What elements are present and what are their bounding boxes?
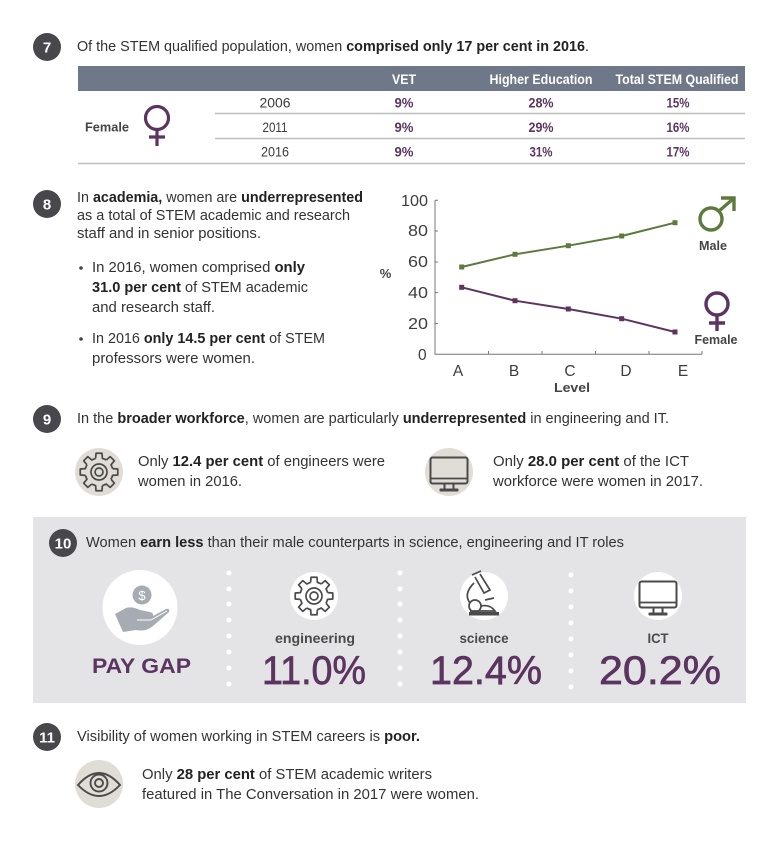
table header: Total STEM Qualified — [616, 72, 738, 87]
icon: microscope — [467, 571, 499, 616]
stat: engineering: 11.0% — [262, 649, 366, 693]
badge 11 — [33, 723, 61, 751]
label: female: Female — [694, 332, 738, 347]
text: academic writers: featured in The Conversation in 2017 were women. — [142, 787, 479, 803]
bullet: 31.0 per cent: 31.0 per cent of STEM academic — [92, 280, 308, 296]
paragraph 8: staff and in senior positions. — [77, 226, 261, 242]
icon: male symbol — [700, 198, 734, 230]
row 2016: 31% — [530, 144, 552, 160]
text: academic writers: Only 28 per cent of STEM academic writers — [142, 767, 432, 783]
badge 7 — [33, 33, 61, 61]
section 9: broader workforce — [33, 405, 703, 496]
label: male: Male — [699, 238, 727, 253]
row 2011: 2011 — [262, 120, 288, 135]
section 8: academia — [33, 190, 738, 395]
axes: B — [509, 363, 519, 380]
row 2006: 15% — [666, 96, 690, 110]
row 2016 — [261, 144, 690, 160]
stat: ICT: ICT — [648, 630, 669, 646]
bullet: 14.5 per cent — [79, 331, 325, 367]
stat: science — [430, 571, 542, 693]
badge 7: 7 — [43, 40, 51, 56]
section 11: visibility — [33, 723, 479, 808]
axes — [380, 193, 702, 395]
stat: ICT: 20.2% — [599, 649, 721, 693]
bullet: 14.5 per cent: In 2016 only 14.5 per cent of STEM — [92, 331, 325, 347]
stat: engineering: engineering — [275, 630, 355, 646]
paragraph 8 — [77, 190, 363, 242]
axes: A — [453, 363, 464, 380]
stat: science: science — [460, 630, 509, 646]
badge 9: 9 — [43, 412, 51, 428]
badge 8: 8 — [43, 196, 51, 214]
paragraph 8: In academia, women are underrepresented — [77, 190, 363, 206]
ICT text — [492, 454, 703, 490]
text: academic writers — [142, 767, 479, 803]
paragraph 8: as a total of STEM academic and research — [77, 208, 350, 224]
icon: female symbol — [706, 293, 728, 331]
row label: female: Female — [85, 120, 129, 134]
male series — [460, 221, 677, 269]
row 2011 — [262, 120, 690, 135]
heading 9: In the broader workforce, women are particularly underrepresented in engineering and IT. — [77, 411, 669, 427]
stat: science: 12.4% — [430, 649, 542, 693]
badge 8 — [33, 190, 61, 218]
row 2016: 9% — [394, 144, 414, 160]
panel: pay gap — [33, 517, 746, 703]
table header — [78, 66, 745, 91]
row 2006 — [260, 96, 690, 110]
axes: 20 — [408, 316, 428, 333]
stat: ICT — [599, 572, 721, 693]
ICT text: workforce were women in 2017. — [492, 474, 703, 490]
badge 9 — [33, 405, 61, 433]
stat: engineering — [262, 572, 366, 693]
table header: VET — [392, 72, 417, 87]
axes: 60 — [408, 254, 428, 271]
row 2006: 28% — [528, 96, 554, 110]
icon: gear — [75, 448, 123, 496]
bullet: 31.0 per cent: and research staff. — [92, 300, 215, 316]
axes: Level — [554, 380, 590, 395]
row 2011: 29% — [528, 120, 554, 135]
row 2016: 17% — [666, 144, 690, 160]
axes: C — [564, 363, 576, 380]
badge 10 — [49, 529, 77, 557]
axes: % — [380, 266, 392, 281]
badge 11: 11 — [39, 730, 55, 746]
ICT text: Only 28.0 per cent of the ICT — [493, 454, 689, 470]
row 2006: 9% — [394, 96, 414, 110]
icon: hand with coin: $ — [138, 588, 146, 603]
female series — [460, 285, 677, 334]
axes: 0 — [418, 347, 427, 364]
bullet: 14.5 per cent: professors were women. — [92, 351, 255, 367]
icon: monitor — [425, 448, 473, 496]
table header: Higher Education — [490, 72, 592, 87]
table — [78, 66, 745, 164]
axes: 80 — [408, 223, 428, 240]
badge 10: 10 — [55, 536, 71, 552]
axes: E — [678, 363, 688, 380]
axes: 100 — [401, 193, 428, 210]
section 7: qualified population table — [33, 33, 745, 164]
engineers text — [137, 454, 385, 490]
heading 7: Of the STEM qualified population, women comprised only 17 per cent in 2016. — [77, 39, 589, 55]
heading 11: Visibility of women working in STEM careers is poor. — [77, 729, 420, 745]
engineers text: women in 2016. — [137, 474, 242, 490]
row 2006: 2006 — [260, 96, 290, 110]
line chart — [380, 193, 738, 395]
icon: female symbol — [146, 106, 168, 146]
row 2011: 16% — [666, 120, 690, 135]
label: pay gap: PAY GAP — [92, 654, 191, 678]
icon: eye — [75, 760, 123, 808]
row 2011: 9% — [394, 120, 414, 135]
engineers text: Only 12.4 per cent of engineers were — [138, 454, 385, 470]
icon: hand with coin — [102, 570, 178, 645]
bullet: 31.0 per cent: In 2016, women comprised only — [92, 260, 305, 276]
axes: 40 — [408, 285, 428, 302]
row 2016: 2016 — [261, 144, 289, 160]
bullet: 31.0 per cent — [79, 260, 308, 316]
heading 10: Women earn less than their male counterparts in science, engineering and IT roles — [86, 535, 624, 551]
axes: D — [620, 363, 632, 380]
